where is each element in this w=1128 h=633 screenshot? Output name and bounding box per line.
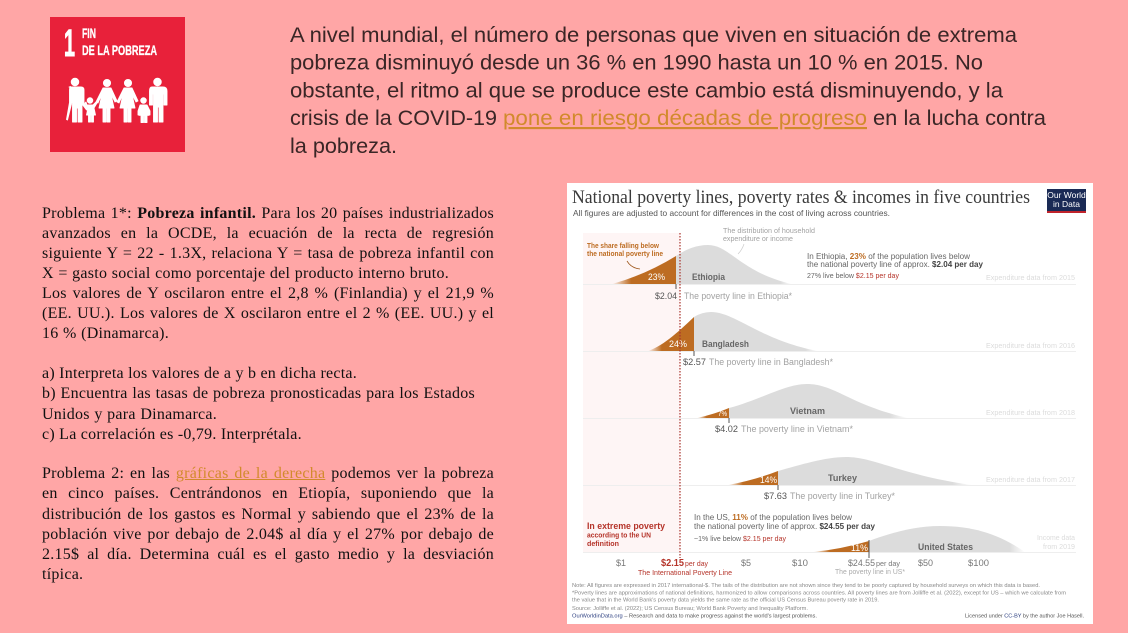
distribution: Bangladesh: 24% <box>669 339 688 350</box>
text block: problema 1: avanzados en la OCDE, la ecuación de la recta de regresión <box>42 225 494 242</box>
logo: Our World in Data <box>1047 189 1086 213</box>
annotation: in extreme poverty: In extreme poverty <box>587 521 666 532</box>
intro text block: obstante, el ritmo al que se produce este cambio está disminuyendo, y la <box>290 78 1003 102</box>
distribution: United States <box>813 526 1076 558</box>
annotation: US summary <box>694 513 875 543</box>
text block: problema 1: Unidos y para Dinamarca. <box>42 406 217 422</box>
chart subtitle: All figures are adjusted to account for differences in the cost of living across countries. <box>573 208 890 218</box>
distribution: Turkey: Turkey <box>828 473 858 484</box>
annotation: Ethiopia summary <box>807 252 984 280</box>
distribution: United States: United States <box>918 542 973 553</box>
distribution: Vietnam: $4.02 <box>715 424 738 435</box>
text block: problema 2 <box>42 465 494 582</box>
extreme poverty band <box>583 233 680 552</box>
distribution: Turkey: 14% <box>760 475 777 486</box>
tile title: FIN <box>82 26 96 41</box>
text block: problema 2: Problema 2: en las gráficas de la derecha podemos ver la pobreza <box>42 465 494 482</box>
annotation: distribution label <box>723 228 815 254</box>
text block: problema 1: (EE. UU.). Los valores de X oscilaron entre el 2 % (EE. UU.) y el <box>42 305 494 322</box>
distribution: Ethiopia: $2.04 <box>655 291 677 302</box>
intro text block: A nivel mundial, el número de personas que viven en situación de extrema <box>290 23 1017 47</box>
chart title: National poverty lines, poverty rates & incomes in five countries <box>572 188 1030 208</box>
distribution: Turkey: The poverty line in Turkey* <box>790 491 895 501</box>
panel: national poverty lines chart <box>567 183 1093 624</box>
distribution: Turkey <box>728 457 1075 502</box>
annotation: Ethiopia summary: 27% live below $2.15 per day <box>807 271 899 280</box>
chart notes and sources: the value that in the World Bank's poverty data yields the same rate as the official US Census Bureau poverty rate in 2019. <box>572 598 879 604</box>
distribution: Vietnam: 7% <box>718 411 727 418</box>
distribution: Bangladesh: $2.57 <box>683 357 706 368</box>
icon: SDG 1 no poverty tile <box>50 17 185 152</box>
text block: problema 2: en cinco países. Centrándonos en Etiopía, suponiendo que la <box>42 485 494 502</box>
annotation: in extreme poverty: definition <box>587 539 619 548</box>
tile title <box>82 26 157 58</box>
annotation: share below poverty line <box>587 241 663 269</box>
income axis labels: $24.55 <box>848 558 875 569</box>
text block: problema 1: Los valores de Y oscilaron entre el 2,8 % (Finlandia) y el 21,9 % <box>42 285 494 302</box>
distribution: United States: Income data <box>1037 533 1076 542</box>
intro text block: pobreza disminuyó desde un 36 % en 1990 hasta un 10 % en 2015. No <box>290 50 983 74</box>
text block: problema 1: b) Encuentra las tasas de pobreza pronosticadas para los Estados <box>42 385 475 402</box>
chart notes and sources: Note: All figures are expressed in 2017 international-$. The tails of the distribution are not shown since they tend to be poorly captured by household surveys on which this data is based. <box>572 583 1040 589</box>
logo: Our World in Data: Our World <box>1047 190 1086 200</box>
income axis labels: $1 <box>616 558 626 569</box>
text block: problema 1: 16 % (Dinamarca). <box>42 325 169 342</box>
distribution: Ethiopia: Expenditure data from 2015 <box>986 273 1075 282</box>
distribution: Vietnam: Vietnam <box>790 406 825 417</box>
income axis labels: The International Poverty Line <box>638 568 732 577</box>
annotation: Ethiopia summary: the national poverty line of approx. $2.04 per day <box>807 260 984 269</box>
icon: family figures <box>66 78 167 122</box>
annotation: distribution label: The distribution of household <box>723 228 815 235</box>
distribution: Vietnam <box>697 384 1075 435</box>
distribution: Bangladesh: Bangladesh <box>702 339 749 350</box>
text block: problema 1: X = gasto social como porcentaje del producto interno bruto. <box>42 265 449 282</box>
text block: problema 1: Problema 1*: Pobreza infantil. Para los 20 países industrializados <box>42 205 494 222</box>
distribution: Turkey: $7.63 <box>764 491 787 502</box>
annotation: US summary: In the US, 11% of the population lives below <box>694 513 852 522</box>
chart notes and sources: Licensed under CC-BY by the author Joe Hasell. <box>965 614 1084 620</box>
income axis labels: The poverty line in US* <box>835 567 905 576</box>
text block: problema 2: típica. <box>42 566 83 582</box>
text block: problema 2: distribución de los gastos es Normal y sabiendo que el 23% de la <box>42 506 494 522</box>
chart notes and sources: Source: Jolliffe et al. (2022); US Census Bureau; World Bank Poverty and Inequality Platform. <box>572 606 808 612</box>
annotation: Ethiopia summary: In Ethiopia, 23% of the population lives below <box>807 252 970 261</box>
distribution: Bangladesh <box>648 312 1075 368</box>
income axis labels: $2.15 <box>661 557 684 569</box>
annotation: in extreme poverty <box>587 521 666 548</box>
text block: problema 2: 2.15$ al día. Determina cuál es el gasto medio y la desviación <box>42 546 494 562</box>
chart notes and sources <box>572 583 1084 620</box>
chart notes and sources: OurWorldinData.org – Research and data to make progress against the world's largest problems. <box>572 614 817 620</box>
distribution: Turkey: Expenditure data from 2017 <box>986 475 1075 484</box>
text block: problema 2: población vive por debajo de 2.04$ al día y el 27% por debajo de <box>42 526 494 542</box>
income axis labels: per day <box>685 559 708 568</box>
annotation: share below poverty line: The share falling below <box>587 241 659 250</box>
distribution: Ethiopia: 23% <box>648 272 665 283</box>
text block: problema 1: c) La correlación es -0,79. Interprétala. <box>42 426 302 442</box>
text block: problema 1: siguiente Y = 22 - 1.3X, relaciona Y = tasa de pobreza infantil con <box>42 245 494 262</box>
annotation: US summary: ~1% live below $2.15 per day <box>694 534 786 543</box>
distribution: Ethiopia: Ethiopia <box>692 272 726 283</box>
income axis labels <box>616 557 989 577</box>
annotation: share below poverty line: the national poverty line <box>587 249 663 258</box>
intro text block: la pobreza. <box>290 134 397 158</box>
income axis labels: $10 <box>792 558 808 569</box>
income axis labels: $100 <box>968 558 989 569</box>
distribution: Vietnam: The poverty line in Vietnam* <box>741 424 853 434</box>
annotation: US summary: the national poverty line of approx. $24.55 per day <box>694 522 875 531</box>
annotation: in extreme poverty: according to the UN <box>587 530 651 540</box>
link: pone en riesgo: pone en riesgo décadas de progreso <box>503 106 867 130</box>
distribution: Bangladesh: The poverty line in Bangladesh* <box>709 357 833 367</box>
text block: problema 1 <box>42 205 494 442</box>
distribution: United States: from 2019 <box>1043 542 1075 551</box>
tile number: 1 <box>64 23 75 65</box>
chart notes and sources: *Poverty lines are approximations of national definitions, harmonized to allow comparisons across countries. All poverty lines are from Jolliffe et al. (2022), except for US – which we calculate from <box>572 590 1066 596</box>
logo: Our World in Data: in Data <box>1053 199 1080 209</box>
intro text block <box>290 23 1046 158</box>
distribution: Vietnam: Expenditure data from 2018 <box>986 408 1075 417</box>
distribution: Ethiopia: The poverty line in Ethiopia* <box>684 291 792 301</box>
income axis labels: $50 <box>918 558 933 569</box>
distribution: United States: 11% <box>851 543 869 554</box>
text block: problema 1: a) Interpreta los valores de a y b en dicha recta. <box>42 365 357 382</box>
intro text block: en la lucha contra <box>873 106 1046 130</box>
distribution: Ethiopia <box>612 245 1075 302</box>
income axis labels: $5 <box>741 558 751 569</box>
intro text block: crisis de la COVID-19 <box>290 106 497 130</box>
international poverty line <box>679 233 681 558</box>
income axis labels: per day <box>876 559 900 568</box>
annotation: distribution label: expenditure or income <box>723 236 793 243</box>
distribution: Bangladesh: Expenditure data from 2016 <box>986 341 1075 350</box>
